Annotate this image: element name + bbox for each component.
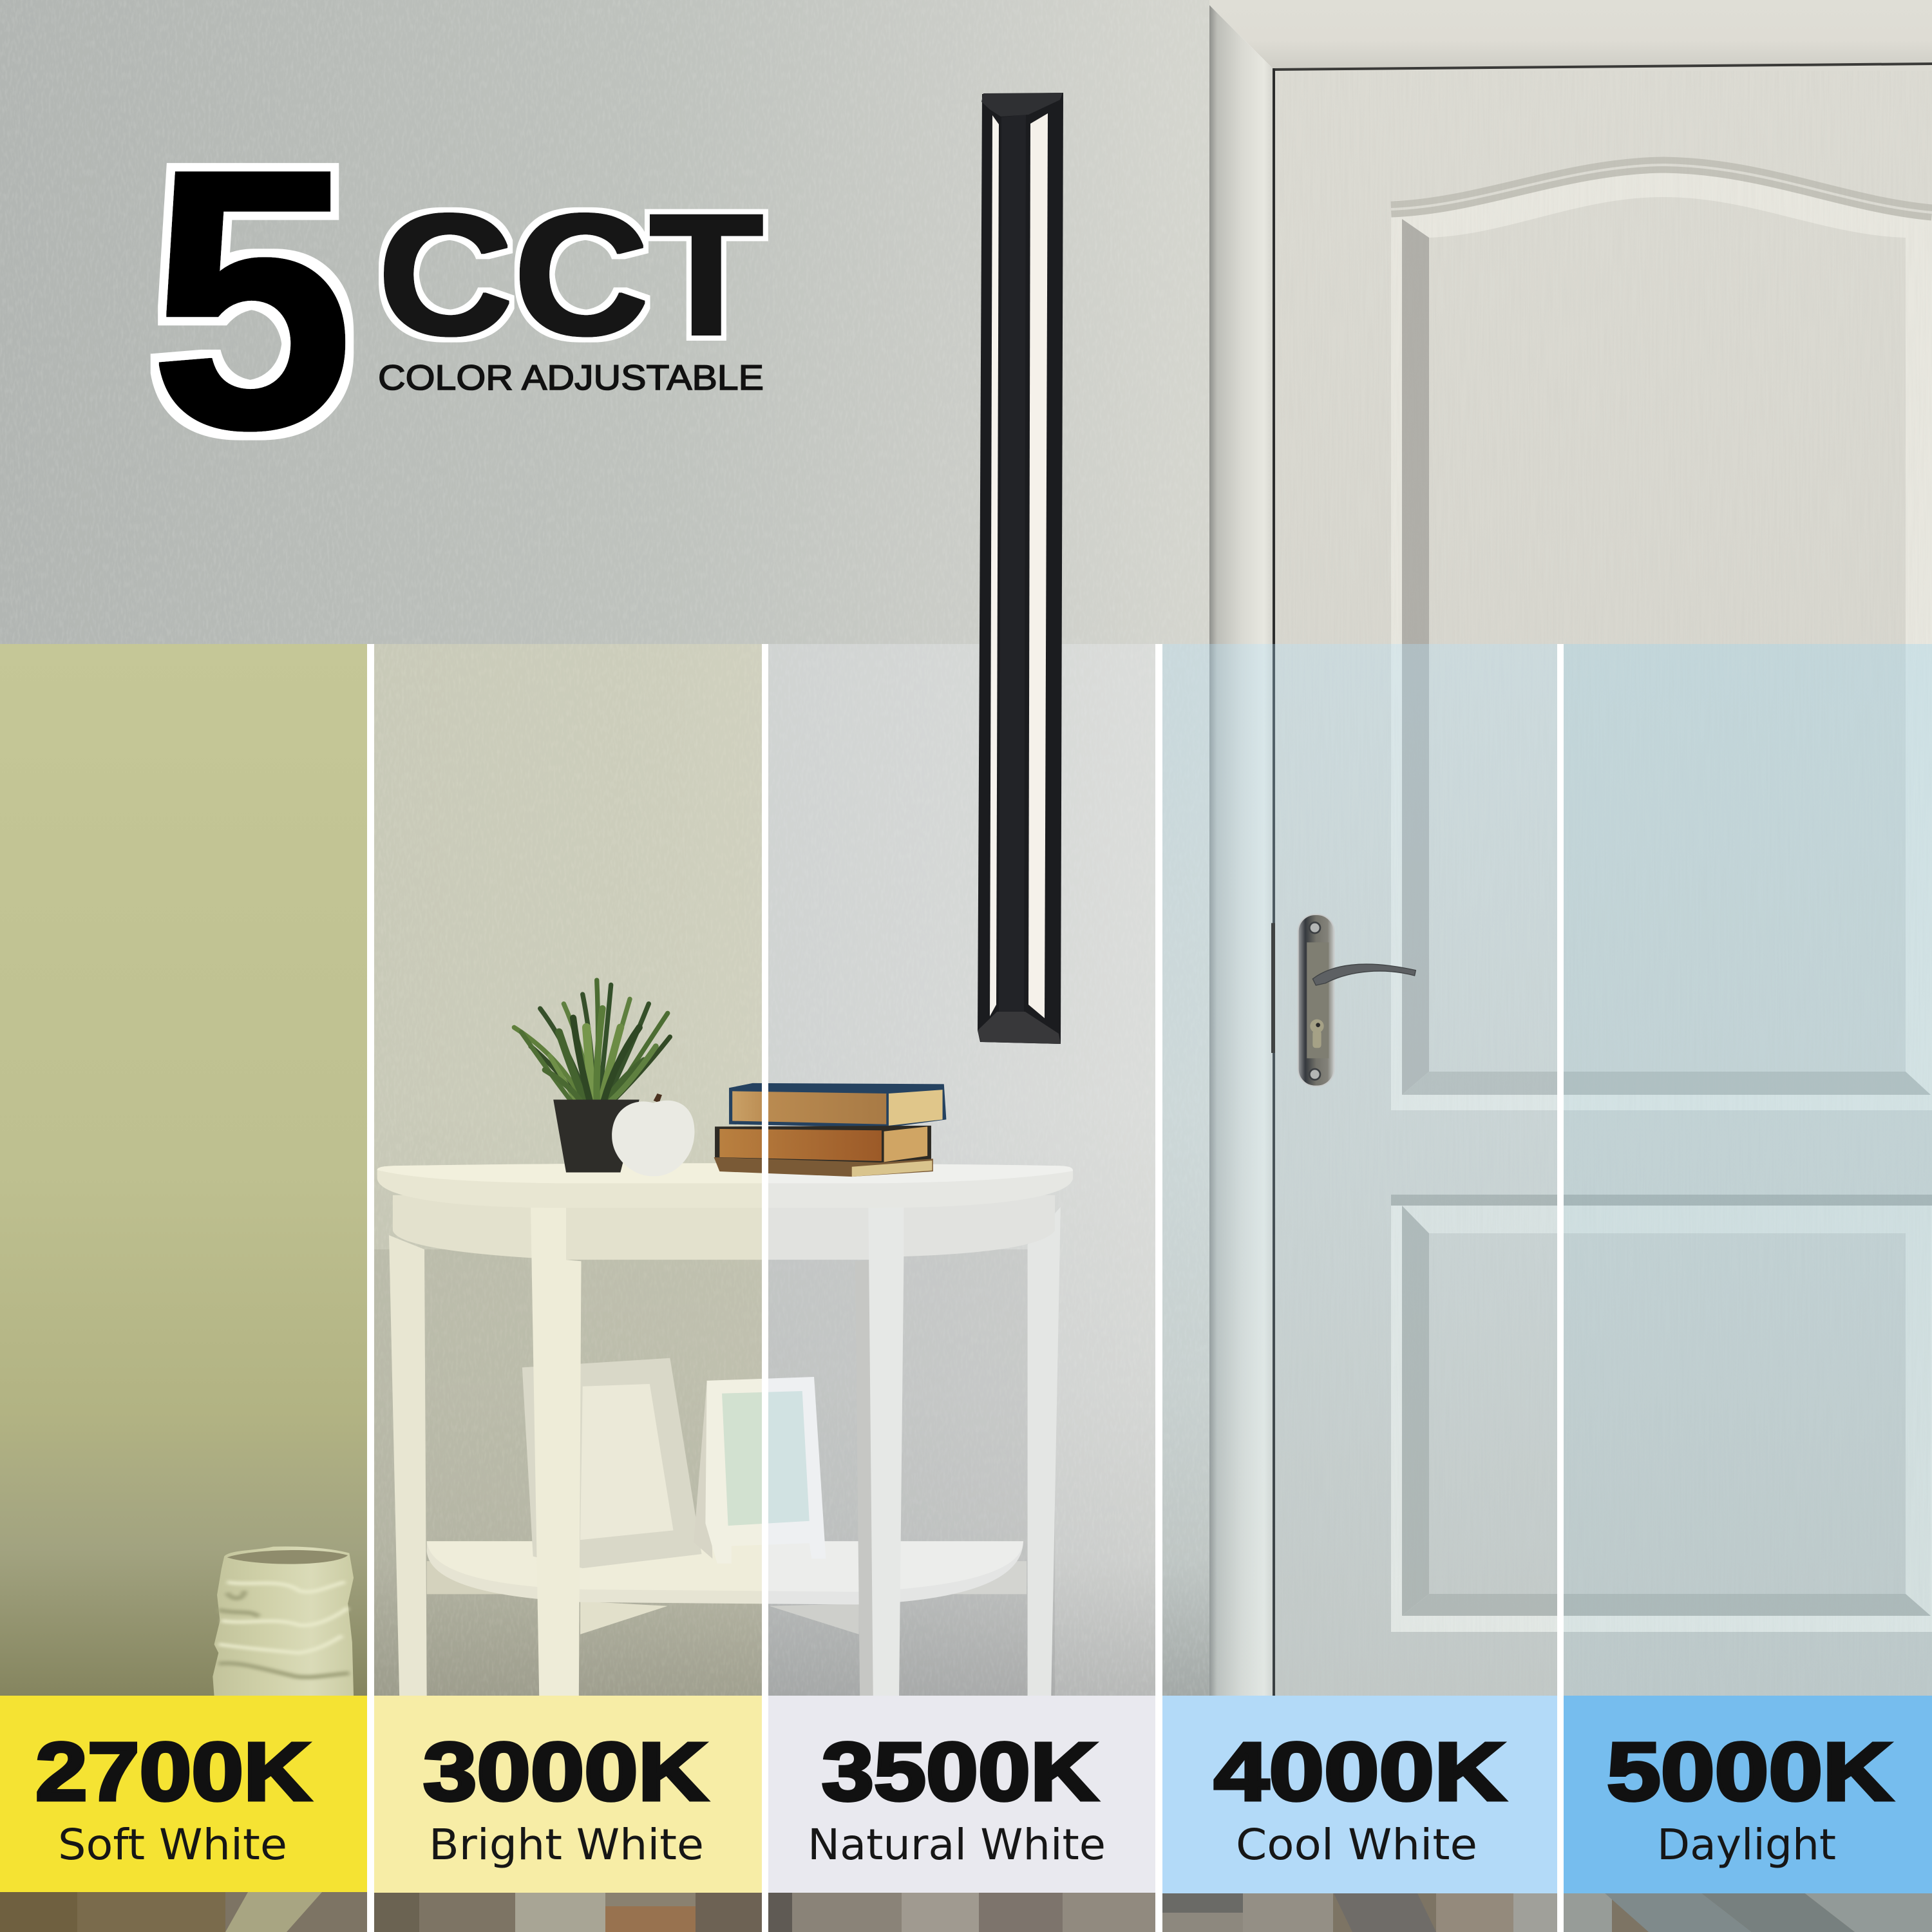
hinge — [1271, 923, 1275, 1053]
label: 3000K Bright White: 3000K — [423, 1726, 708, 1818]
table top — [377, 1163, 1073, 1208]
white apple — [612, 1094, 695, 1176]
wood floor strip — [0, 1887, 1932, 1932]
label: 2700K Soft White: Soft White — [58, 1820, 287, 1870]
title numeral 5: 5 — [149, 92, 354, 506]
title CCT: CCT — [377, 178, 764, 371]
shelf — [427, 1541, 1027, 1634]
plant pot — [553, 1100, 639, 1172]
door side trim — [1209, 5, 1274, 1700]
keyhole — [1310, 1019, 1324, 1048]
stacked books — [714, 1083, 946, 1177]
label: 3500K Natural White — [768, 1696, 1155, 1893]
label: 3000K Bright White — [374, 1696, 762, 1893]
console table — [342, 1163, 1073, 1696]
silver picture frame — [522, 1358, 702, 1568]
title: 5 CCT color adjustable — [149, 92, 764, 506]
lever — [1312, 964, 1416, 985]
label: 3000K Bright White: Bright White — [429, 1820, 704, 1870]
back legs — [389, 1207, 1061, 1696]
white picture frame — [694, 1377, 826, 1564]
panel tints: light colour temperature overlays — [0, 644, 1932, 1700]
top cap — [981, 93, 1063, 117]
door wood grain — [1274, 71, 1932, 1700]
wall sconce lamp — [978, 93, 1063, 1044]
label: 3500K Natural White: Natural White — [808, 1820, 1106, 1870]
screws — [1309, 922, 1320, 933]
label: 3500K Natural White: 3500K — [822, 1726, 1098, 1818]
subtitle: COLOR ADJUSTABLE — [378, 357, 764, 397]
lamp body — [978, 93, 1063, 1044]
door top trim — [1209, 0, 1932, 70]
tint: 2700K — [0, 644, 367, 1700]
front legs — [531, 1207, 904, 1696]
backplate — [1298, 914, 1334, 1086]
tint: 5000K — [1564, 644, 1932, 1700]
center column — [999, 115, 1026, 1012]
label: 4000K Cool White: 4000K — [1214, 1726, 1506, 1818]
tint: 4000K — [1162, 644, 1557, 1700]
apron — [393, 1195, 1055, 1260]
label: 5000K Daylight: Daylight — [1657, 1820, 1836, 1870]
upper door panel — [1391, 158, 1932, 1110]
tabletop decor — [514, 980, 946, 1177]
tint: 3500K — [768, 644, 1155, 1700]
label: 2700K Soft White — [0, 1696, 367, 1892]
label: 4000K Cool White: Cool White — [1236, 1820, 1477, 1870]
right light window — [1028, 113, 1048, 1018]
left light window — [990, 115, 999, 1016]
plant — [514, 980, 670, 1101]
wall background — [0, 0, 1211, 1893]
tint: 3000K — [374, 644, 762, 1700]
bottom cap — [978, 1012, 1061, 1044]
label: 4000K Cool White — [1162, 1696, 1557, 1893]
door handle — [1271, 914, 1416, 1086]
label: 5000K Daylight — [1564, 1696, 1932, 1893]
label: 2700K Soft White: 2700K — [35, 1726, 311, 1818]
door leaf — [1274, 64, 1932, 1700]
door and frame — [1209, 0, 1932, 1700]
white panel dividers — [367, 644, 1564, 1932]
ceramic vase — [213, 1546, 354, 1696]
lower door panel — [1391, 1195, 1932, 1632]
label: 5000K Daylight: 5000K — [1607, 1726, 1893, 1818]
shadow under table — [342, 1249, 1055, 1696]
